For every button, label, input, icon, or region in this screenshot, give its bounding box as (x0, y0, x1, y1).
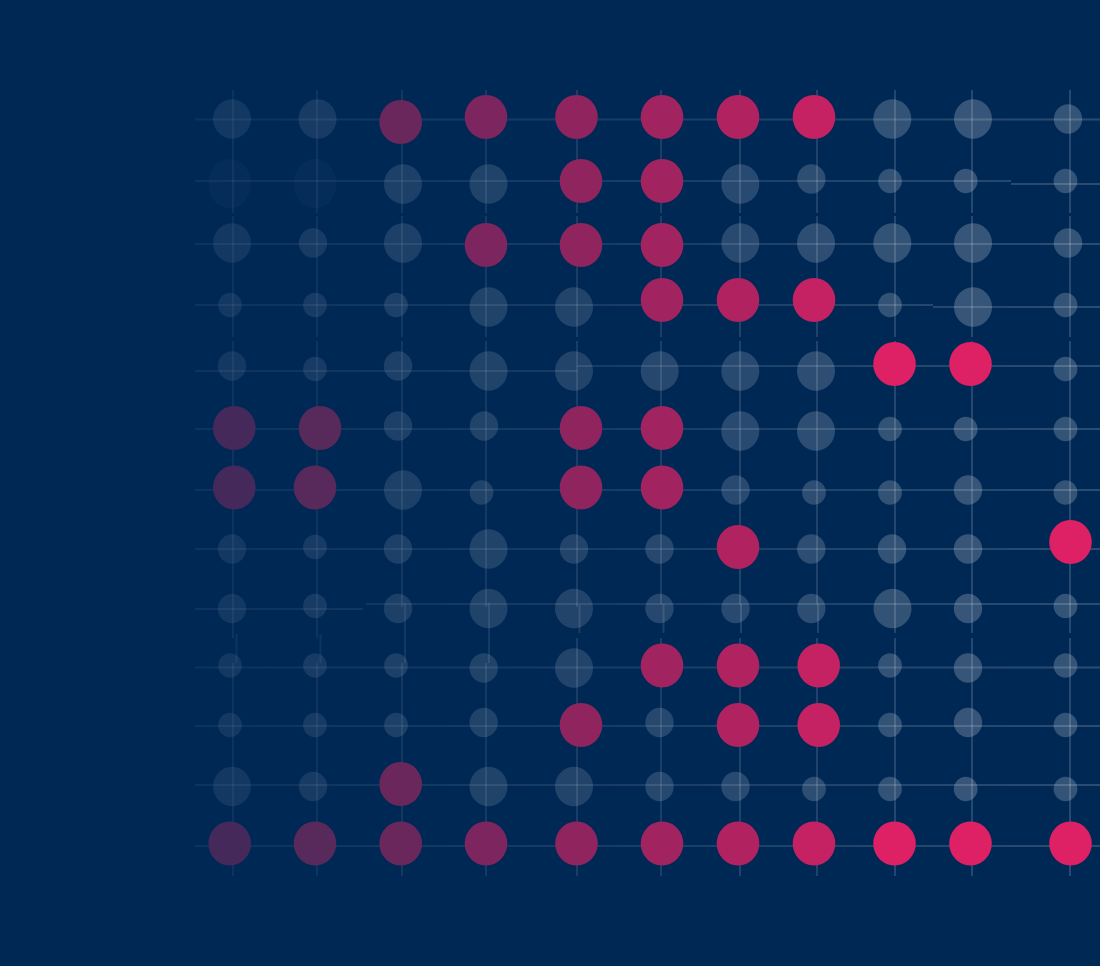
dot row 5 (218, 342, 1077, 391)
dot row 1 (213, 95, 1082, 144)
horizontal grid lines (195, 120, 1100, 846)
dot row 13 (208, 822, 1092, 866)
dot row 9 (218, 589, 1077, 628)
dot row 6 (213, 406, 1077, 451)
dot row 10 (218, 644, 1077, 688)
dot row 12 (213, 762, 1077, 806)
dot row 7 (213, 466, 1077, 510)
dot row 2 (208, 159, 1077, 208)
dot row 3 (213, 223, 1082, 267)
dot row 8 (218, 520, 1092, 569)
dot row 11 (218, 703, 1077, 747)
vertical grid lines (233, 90, 1070, 876)
dot row 4 (218, 278, 1077, 327)
